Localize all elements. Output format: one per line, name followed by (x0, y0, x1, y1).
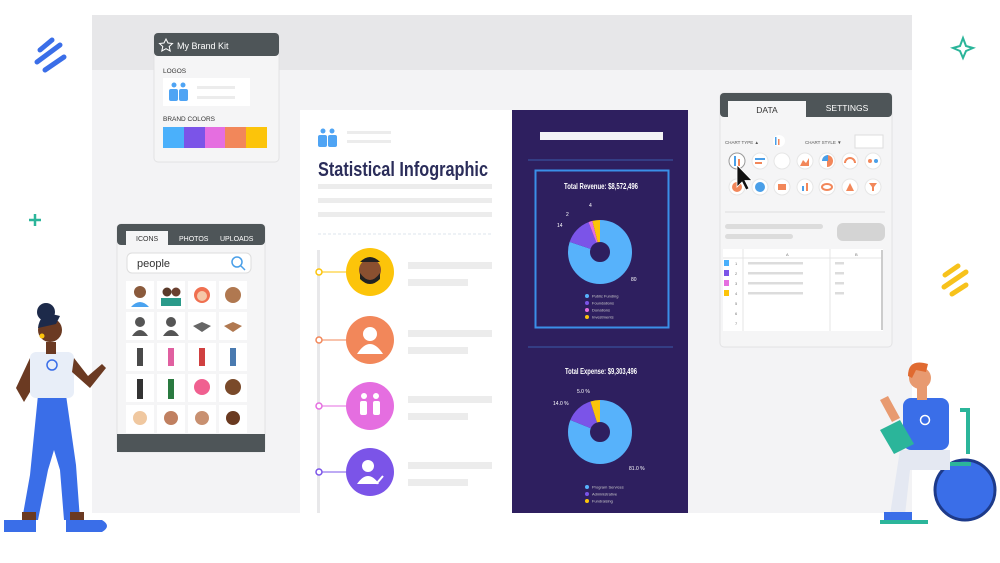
decoration: blue strokes (37, 40, 64, 70)
expense chart: 5.0 % (577, 389, 590, 395)
title: Statistical Infographic (318, 159, 488, 181)
chart type icons (729, 153, 881, 195)
icon: user check (346, 448, 394, 496)
expense chart: 81.0 % (629, 466, 645, 472)
revenue chart box (536, 170, 668, 328)
revenue chart box: Investments (592, 314, 614, 320)
browser window background (92, 15, 912, 513)
panel: chart data settings: CHART STYLE ▼ (805, 140, 842, 145)
revenue chart box: Total Revenue: $8,572,496 (564, 182, 638, 191)
panel: infographic document (300, 110, 512, 513)
revenue chart box: 14 (557, 223, 563, 229)
icon grid (126, 281, 247, 433)
panel: chart data settings: CHART TYPE ▲ (725, 140, 759, 145)
cursor (737, 165, 752, 190)
revenue chart box: Public Funding (592, 294, 618, 298)
icon: two people (346, 382, 394, 430)
decoration: yellow strokes (944, 266, 966, 294)
search box (127, 253, 251, 273)
data table: 2 (735, 271, 738, 276)
expense chart: Total Expense: $9,303,496 (565, 367, 637, 376)
panel: icons search: UPLOADS (220, 236, 254, 243)
panel: icons search: PHOTOS (179, 236, 209, 243)
panel: icons search: ICONS (136, 236, 158, 243)
expense chart: 14.0 % (553, 401, 569, 407)
data table: A (786, 252, 789, 257)
character: man in wheelchair (880, 362, 995, 524)
brand colors swatches (163, 127, 267, 148)
logo box (163, 78, 250, 106)
brand kit heading: My Brand Kit (177, 41, 229, 51)
panel: brand kit: LOGOS (163, 68, 187, 75)
panel: chart data settings (720, 93, 892, 347)
panel: brand kit (154, 33, 279, 162)
data table (723, 249, 883, 331)
revenue chart box: 4 (589, 203, 592, 209)
revenue donut (579, 231, 621, 273)
revenue chart box: Foundations (592, 300, 614, 306)
decoration: green plus (29, 214, 41, 226)
placeholder bars (408, 262, 492, 486)
expense chart (553, 367, 645, 504)
data table: 6 (735, 311, 738, 316)
revenue chart box: 80 (631, 277, 637, 283)
character: woman standing (4, 303, 107, 532)
decoration: green sparkle (953, 38, 973, 58)
panel: brand kit: BRAND COLORS (163, 116, 216, 123)
panel: chart data settings: SETTINGS (826, 103, 869, 113)
data table: B (855, 252, 858, 257)
panel: chart data settings: DATA (756, 105, 778, 115)
panel: icons search (117, 224, 265, 452)
expense chart: Administrative (592, 492, 618, 496)
icon: bearded man (346, 248, 394, 296)
data table: 3 (735, 281, 738, 286)
data table: 5 (735, 301, 738, 306)
timeline (316, 250, 346, 513)
revenue chart box: Donations (592, 308, 610, 312)
text placeholder lines (318, 184, 492, 217)
doc logo (318, 128, 391, 147)
data table: 4 (735, 291, 738, 296)
expense chart: Fundraising (592, 498, 613, 504)
icon: person (346, 316, 394, 364)
data table: 7 (735, 321, 738, 326)
expense chart: Program Services (592, 484, 624, 490)
panel: purple chart column (512, 110, 688, 513)
data table: 1 (735, 261, 738, 266)
search box: people (137, 258, 170, 270)
revenue chart box: 2 (566, 212, 569, 218)
